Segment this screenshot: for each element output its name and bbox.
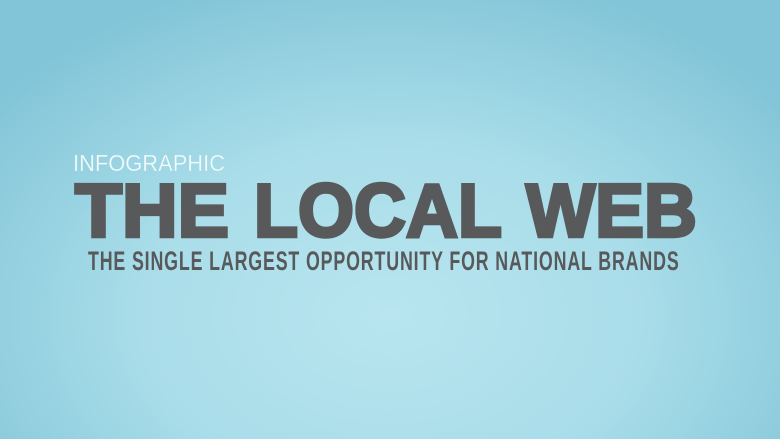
title: THE <box>75 168 229 252</box>
title: WEB <box>526 168 697 252</box>
subtitle: THE SINGLE LARGEST OPPORTUNITY FOR NATIONAL BRANDS <box>88 245 679 276</box>
title: LOCAL <box>254 168 502 252</box>
title <box>75 168 697 252</box>
label: infographic: INFOGRAPHIC <box>73 150 225 176</box>
